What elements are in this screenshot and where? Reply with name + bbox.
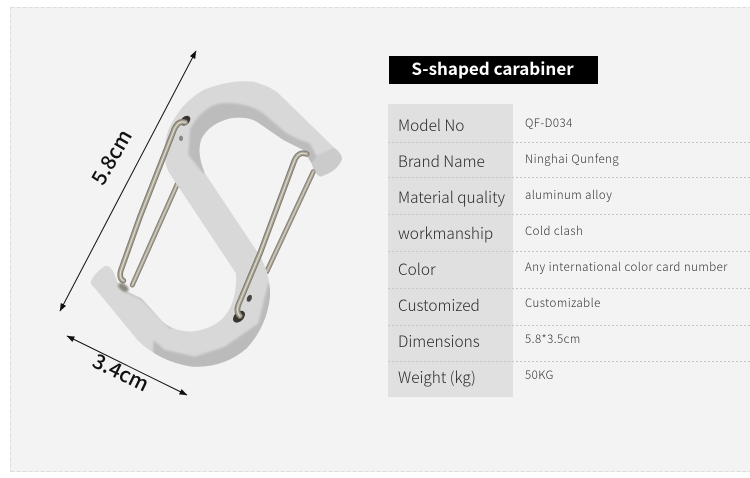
tip end face bbox=[312, 148, 342, 176]
row: dimensions: Dimensions bbox=[398, 330, 480, 352]
row: weight: 50KG bbox=[525, 367, 554, 383]
inner bevel on upper hook bbox=[188, 103, 340, 180]
row: color bbox=[398, 258, 728, 280]
row: workmanship: workmanship bbox=[398, 222, 493, 244]
rivet holes bbox=[178, 114, 192, 128]
row: model bbox=[398, 114, 573, 136]
row: dimensions: 5.8*3.5cm bbox=[525, 331, 581, 347]
row: model: QF-D034 bbox=[525, 115, 573, 131]
row: brand: Brand Name bbox=[398, 150, 485, 172]
spec table bbox=[388, 104, 750, 397]
height label: 5.8cm bbox=[82, 123, 138, 190]
S-shaped body bbox=[90, 81, 342, 367]
row: model: Model No bbox=[398, 114, 464, 136]
row: color: Any international color card number bbox=[525, 259, 728, 275]
row: material bbox=[398, 186, 612, 208]
title bar bbox=[389, 55, 598, 84]
row: workmanship bbox=[398, 222, 583, 244]
row: brand bbox=[398, 150, 619, 172]
width label: 3.4cm bbox=[88, 344, 155, 397]
row: material: aluminum alloy bbox=[525, 187, 612, 203]
row: color: Color bbox=[398, 258, 436, 280]
outer rim on lower hook bbox=[152, 283, 270, 367]
row: customized: Customized bbox=[398, 294, 480, 316]
shading on lower hook bbox=[126, 292, 172, 328]
carabiner product illustration bbox=[90, 81, 342, 367]
front wires bbox=[120, 122, 307, 316]
rear wires bbox=[132, 172, 313, 285]
row: customized: Customizable bbox=[525, 295, 601, 311]
row: weight bbox=[398, 366, 554, 388]
row: dimensions bbox=[398, 330, 581, 352]
row: material: Material quality bbox=[398, 186, 505, 208]
row: workmanship: Cold clash bbox=[525, 223, 583, 239]
row: brand: Ninghai Qunfeng bbox=[525, 151, 619, 167]
title bar: S-shaped carabiner bbox=[411, 55, 574, 80]
row: customized bbox=[398, 294, 601, 316]
label column bbox=[388, 104, 513, 397]
row: weight: Weight (kg) bbox=[398, 366, 476, 388]
arrow: width dimension bbox=[67, 336, 187, 395]
arrow: height dimension bbox=[60, 51, 196, 311]
